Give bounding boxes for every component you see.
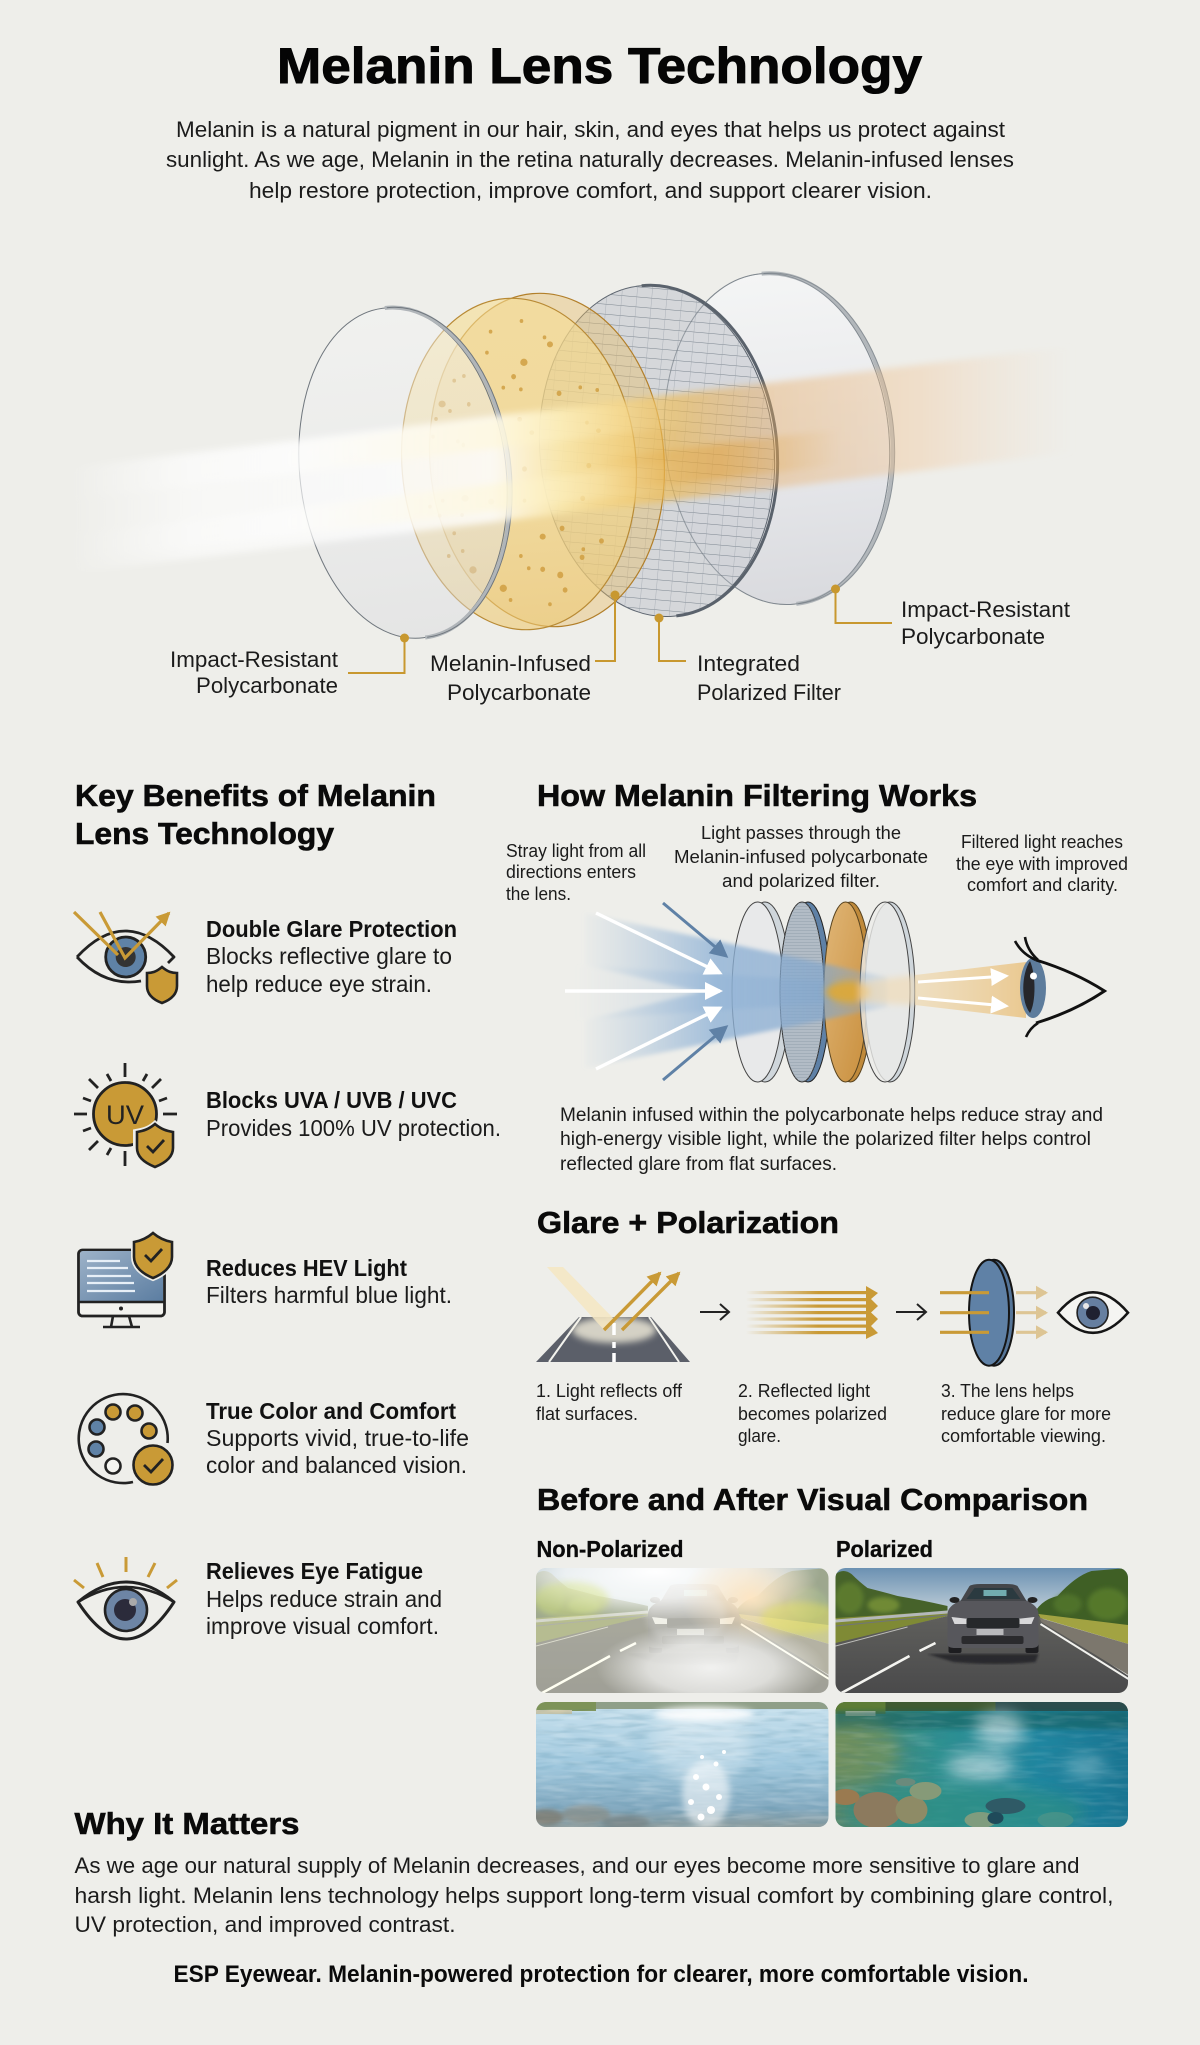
step 2 caption: 2. Reflected light bbox=[738, 1380, 870, 1401]
caption: stray light: directions enters bbox=[506, 861, 636, 882]
label: melanin layer: Polycarbonate bbox=[447, 680, 591, 705]
icon: clear eye bbox=[1058, 1292, 1128, 1333]
benefit: blocks UV bbox=[206, 1087, 501, 1141]
lens: clear back bbox=[860, 902, 915, 1082]
label: front layer bbox=[170, 647, 338, 698]
panel: how melanin filtering works bbox=[506, 778, 1128, 1175]
photo: road polarized bbox=[836, 1568, 1128, 1693]
benefit: true color and comfort bbox=[206, 1398, 469, 1478]
panel: why it matters bbox=[74, 1806, 1114, 1937]
lens: amber melanin bbox=[824, 902, 872, 1082]
label: front layer: Polycarbonate bbox=[196, 673, 338, 698]
intro text: help restore protection, improve comfort, and support clearer vision. bbox=[249, 178, 932, 203]
explanation text: Melanin infused within the polycarbonate helps reduce stray and bbox=[560, 1104, 1103, 1126]
icon: lens blocking glare bbox=[940, 1260, 1046, 1366]
outgoing white arrows bbox=[918, 976, 1006, 1006]
heading: key benefits: Lens Technology bbox=[75, 816, 335, 851]
heading: how melanin filtering works: How Melanin Filtering Works bbox=[537, 778, 977, 813]
column label: non-polarized: Non-Polarized bbox=[536, 1536, 684, 1562]
step 2 caption bbox=[738, 1380, 887, 1446]
benefit: relieves eye fatigue: Relieves Eye Fatigue bbox=[206, 1558, 423, 1584]
leader: front polycarbonate bbox=[348, 634, 409, 673]
column label: polarized: Polarized bbox=[836, 1536, 933, 1562]
benefit: reduces HEV light: Filters harmful blue light. bbox=[206, 1282, 452, 1308]
label: polarized layer: Integrated bbox=[697, 651, 800, 676]
photo: lake with glare bbox=[528, 1702, 829, 1829]
label: front layer: Impact-Resistant bbox=[170, 647, 338, 672]
panel: exploded lens layers bbox=[70, 262, 1075, 705]
caption: light passes through: and polarized filter. bbox=[722, 870, 880, 891]
intro text: Melanin is a natural pigment in our hair, skin, and eyes that helps us protect against bbox=[176, 117, 1005, 142]
photo: road with glare bbox=[536, 1568, 828, 1693]
explanation text: high-energy visible light, while the polarized filter helps control bbox=[560, 1128, 1091, 1150]
benefit: double glare protection: Blocks reflective glare to bbox=[206, 943, 452, 969]
arrow: step 2 to 3 bbox=[896, 1304, 926, 1320]
label: melanin layer: Melanin-Infused bbox=[430, 651, 591, 676]
caption: light passes through bbox=[674, 822, 928, 891]
label: back layer: Impact-Resistant bbox=[901, 597, 1070, 622]
incoming blue arrows bbox=[663, 903, 726, 1080]
step 3 caption: reduce glare for more bbox=[941, 1403, 1111, 1424]
melanin particles bbox=[428, 319, 604, 606]
benefit: relieves eye fatigue: improve visual comfort. bbox=[206, 1613, 439, 1639]
icon: side view eye bbox=[1015, 937, 1104, 1037]
arrow: step 1 to 2 bbox=[700, 1304, 729, 1320]
icon: relaxed eye with rays bbox=[74, 1557, 177, 1639]
label: back layer: Polycarbonate bbox=[901, 624, 1045, 649]
label: polarized layer bbox=[697, 651, 841, 705]
lens: clear front bbox=[732, 902, 790, 1082]
step 1 caption bbox=[536, 1380, 683, 1424]
heading: glare + polarization: Glare + Polarization bbox=[537, 1205, 839, 1240]
explanation text bbox=[560, 1104, 1103, 1175]
intro text: sunlight. As we age, Melanin in the retina naturally decreases. Melanin-infused lenses bbox=[166, 147, 1014, 172]
leader: polarized filter bbox=[654, 614, 686, 661]
blue stray light beam bbox=[575, 913, 887, 1068]
benefit: double glare protection bbox=[206, 916, 457, 997]
label: polarized layer: Polarized Filter bbox=[697, 680, 841, 705]
body text bbox=[74, 1853, 1114, 1937]
lens layer: back impact-resistant polycarbonate bbox=[648, 262, 911, 616]
icon: light reflecting on road bbox=[536, 1267, 690, 1362]
body text: UV protection, and improved contrast. bbox=[74, 1912, 455, 1937]
caption: filtered light: Filtered light reaches bbox=[961, 831, 1123, 852]
step 1 caption: 1. Light reflects off bbox=[536, 1380, 683, 1401]
benefit: double glare protection: Double Glare Protection bbox=[206, 916, 457, 942]
heading: why it matters: Why It Matters bbox=[74, 1806, 300, 1841]
caption: stray light: Stray light from all bbox=[506, 840, 646, 861]
step 3 caption bbox=[941, 1380, 1111, 1446]
icon: UV sun with shield: UV bbox=[106, 1100, 144, 1130]
lens layer: melanin-infused polycarbonate bbox=[388, 283, 678, 640]
icon: glare eye with shield bbox=[74, 912, 177, 1003]
body text: As we age our natural supply of Melanin decreases, and our eyes become more sensitive to glare and bbox=[74, 1853, 1080, 1878]
benefit: true color and comfort: color and balanced vision. bbox=[206, 1452, 467, 1478]
intro text bbox=[166, 117, 1014, 203]
body text: harsh light. Melanin lens technology helps support long-term visual comfort by combining glare control, bbox=[74, 1883, 1114, 1908]
light beam passing through lens layers bbox=[70, 346, 1075, 573]
heading: key benefits bbox=[75, 778, 436, 851]
step 3 caption: 3. The lens helps bbox=[941, 1380, 1074, 1401]
caption: filtered light: the eye with improved bbox=[956, 853, 1128, 874]
panel: before and after comparison bbox=[536, 1488, 1128, 1827]
label: melanin layer bbox=[430, 651, 591, 705]
panel: key benefits bbox=[74, 778, 501, 1639]
caption: stray light bbox=[506, 840, 646, 904]
caption: filtered light bbox=[956, 831, 1128, 895]
icon: polarized glare lines bbox=[746, 1286, 878, 1339]
incoming white arrows bbox=[565, 913, 720, 1069]
benefit: blocks UV: Provides 100% UV protection. bbox=[206, 1115, 501, 1141]
benefit: relieves eye fatigue: Helps reduce strain and bbox=[206, 1586, 442, 1612]
heading: key benefits: Key Benefits of Melanin bbox=[75, 778, 436, 813]
orange output beam bbox=[915, 962, 1026, 1018]
benefit: relieves eye fatigue bbox=[206, 1558, 442, 1639]
caption: filtered light: comfort and clarity. bbox=[967, 874, 1118, 895]
step 2 caption: glare. bbox=[738, 1425, 781, 1446]
benefit: blocks UV: Blocks UVA / UVB / UVC bbox=[206, 1087, 457, 1113]
caption: light passes through: Light passes through the bbox=[701, 822, 901, 843]
icon: UV sun with shield bbox=[74, 1063, 177, 1168]
lens: polarized grey bbox=[780, 902, 830, 1082]
photo: lake polarized bbox=[836, 1702, 1128, 1827]
benefit: double glare protection: help reduce eye strain. bbox=[206, 971, 432, 997]
lens layer: front impact-resistant polycarbonate bbox=[281, 295, 530, 650]
icon: colour palette with check bbox=[79, 1394, 172, 1484]
label: back layer bbox=[901, 597, 1070, 649]
step 2 caption: becomes polarized bbox=[738, 1403, 887, 1424]
diagram: light filtering through lens stack bbox=[565, 902, 1104, 1082]
leader: back polycarbonate bbox=[831, 584, 892, 623]
heading: before and after: Before and After Visual Comparison bbox=[537, 1482, 1088, 1517]
leader: melanin polycarbonate bbox=[595, 590, 620, 661]
benefit: reduces HEV light: Reduces HEV Light bbox=[206, 1255, 407, 1281]
panel: glare and polarization bbox=[536, 1205, 1128, 1446]
caption: stray light: the lens. bbox=[506, 883, 571, 904]
step 3 caption: comfortable viewing. bbox=[941, 1425, 1106, 1446]
step 1 caption: flat surfaces. bbox=[536, 1403, 638, 1424]
lens layer: polarized filter grid bbox=[540, 273, 890, 618]
benefit: reduces HEV light bbox=[206, 1255, 452, 1308]
title: Melanin Lens Technology bbox=[277, 38, 922, 94]
explanation text: reflected glare from flat surfaces. bbox=[560, 1153, 837, 1175]
benefit: true color and comfort: Supports vivid, true-to-life bbox=[206, 1425, 469, 1451]
tagline: ESP Eyewear. Melanin-powered protection for clearer, more comfortable vision. bbox=[174, 1961, 1028, 1988]
caption: light passes through: Melanin-infused polycarbonate bbox=[674, 846, 928, 867]
filtered center glow bbox=[826, 975, 915, 1005]
benefit: true color and comfort: True Color and Comfort bbox=[206, 1398, 456, 1424]
icon: computer monitor with shield bbox=[78, 1233, 172, 1327]
